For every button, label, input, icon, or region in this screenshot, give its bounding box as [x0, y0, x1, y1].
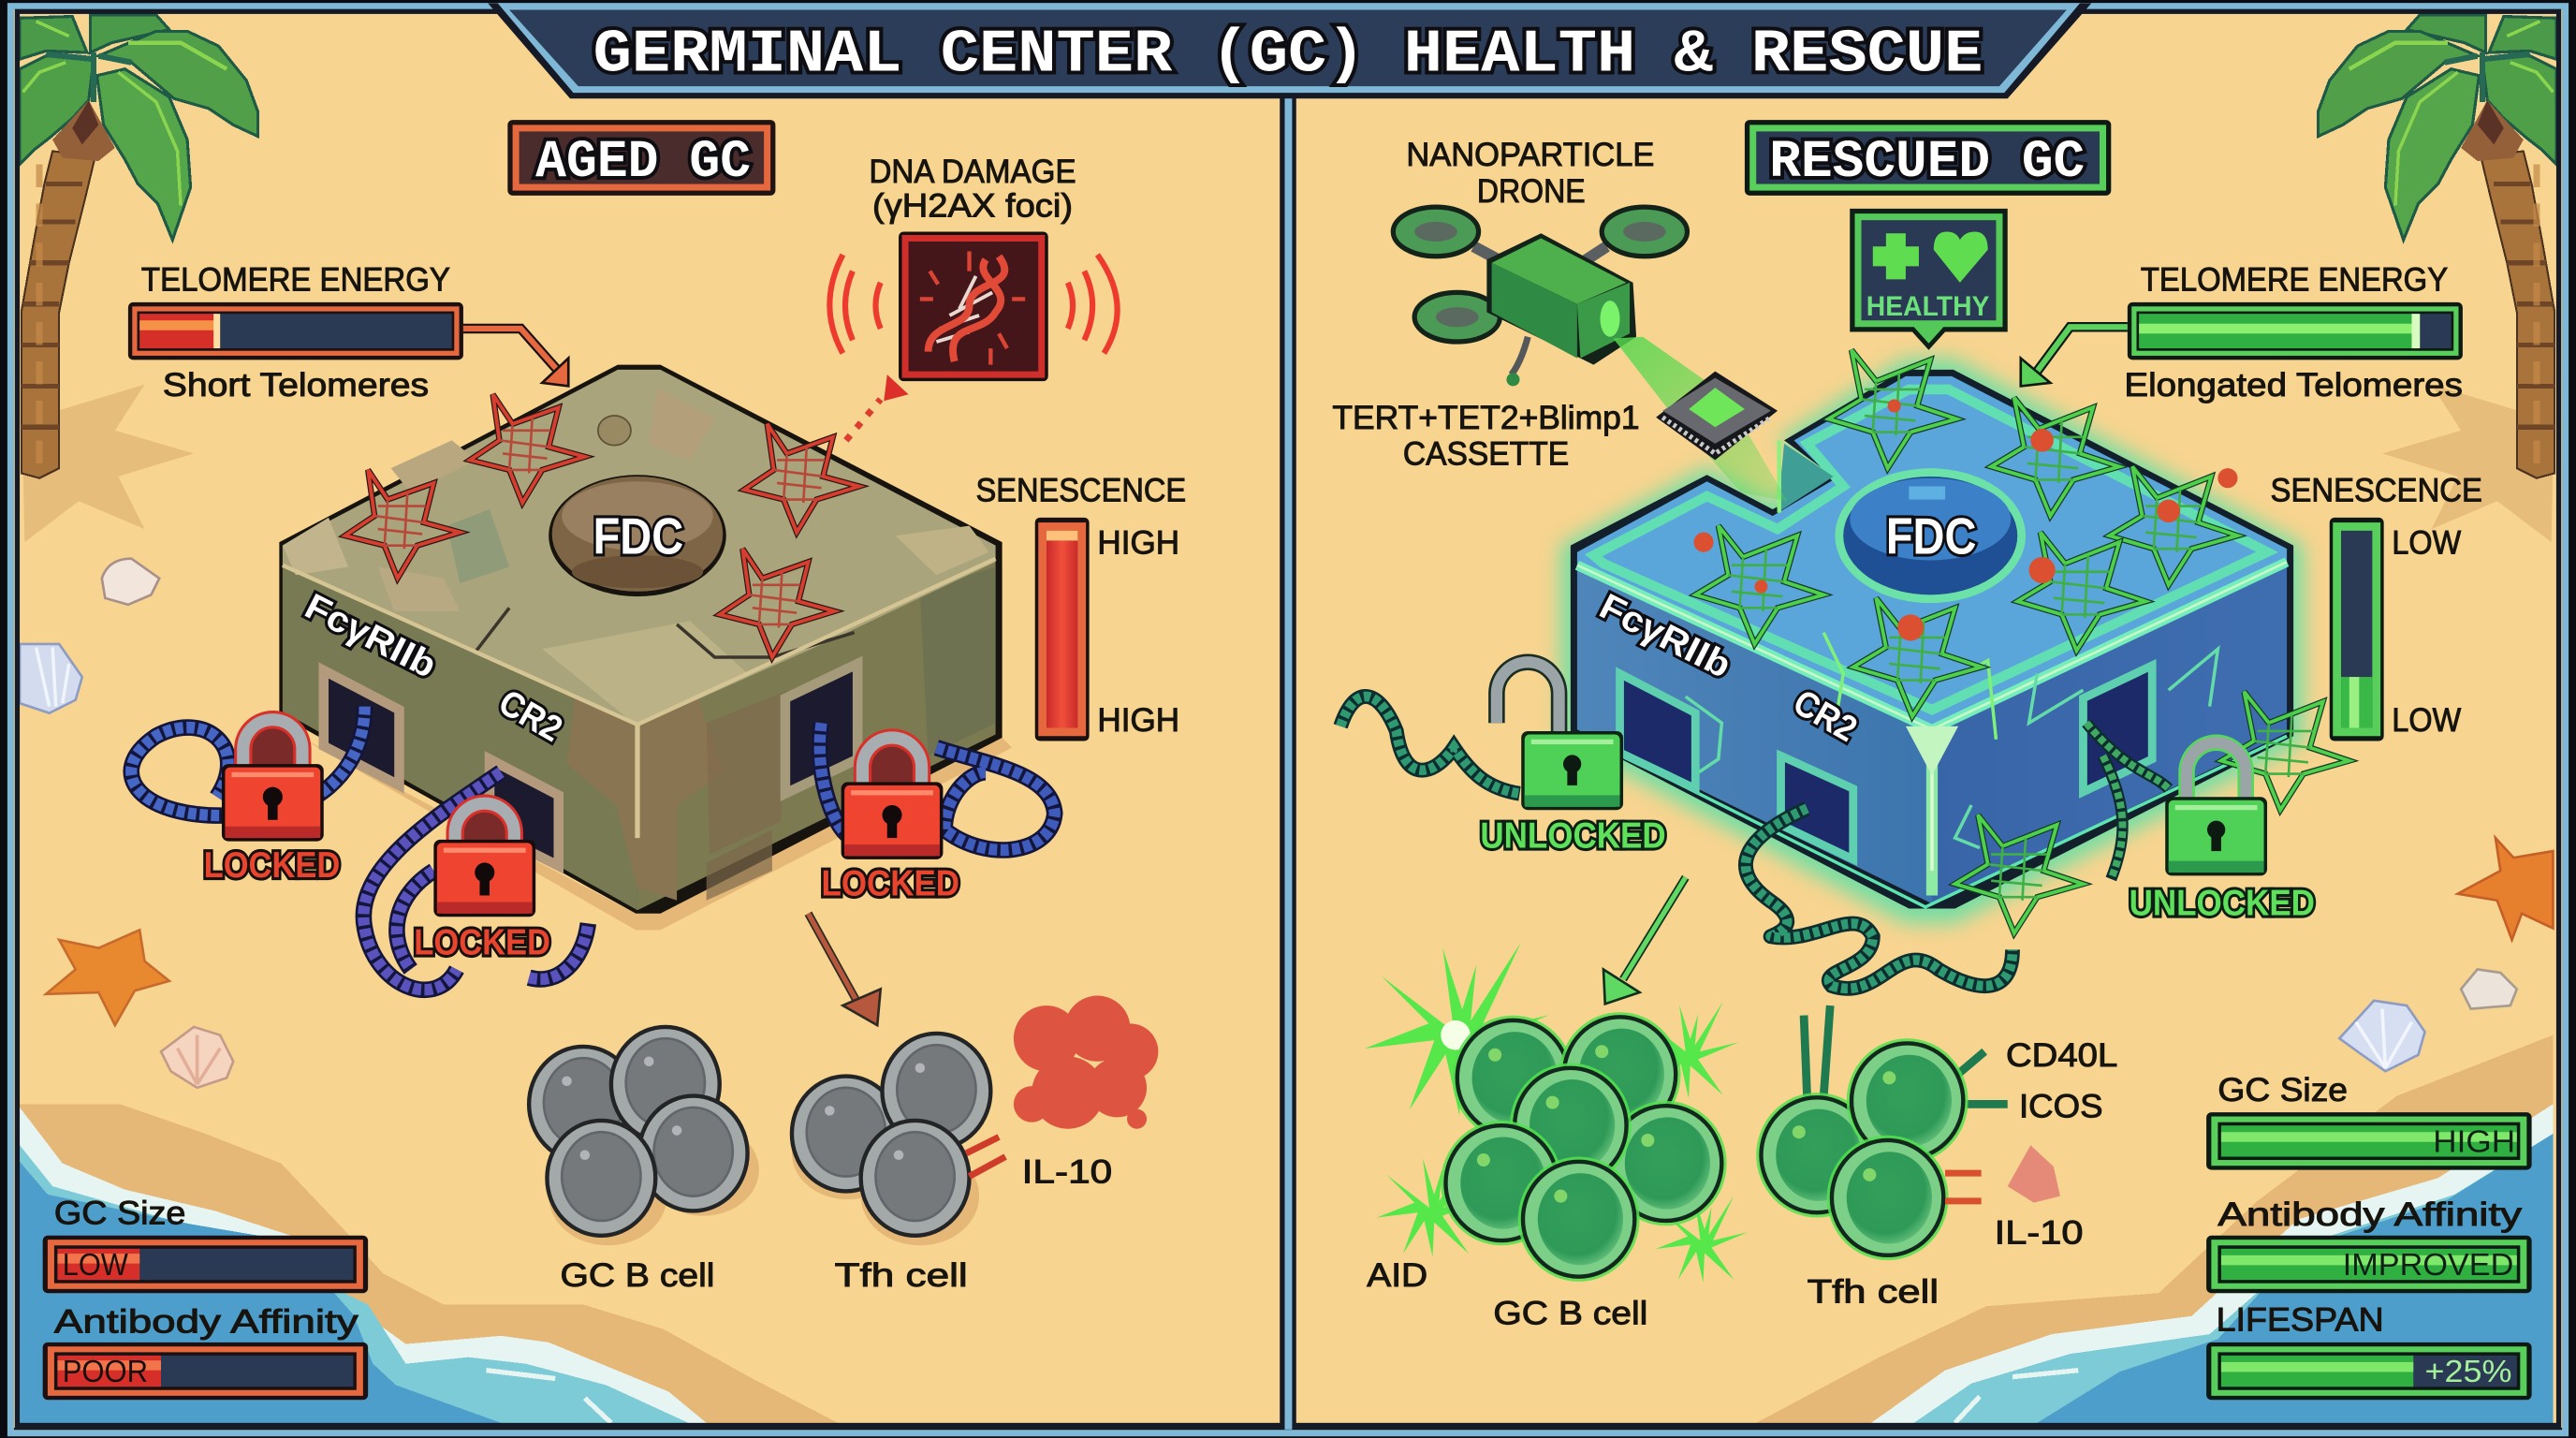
Tfh cell cluster rescued [1756, 1005, 2117, 1311]
chain: right [820, 723, 1055, 850]
unlock: left [1480, 662, 1666, 857]
web: rescued 4 [1694, 526, 1823, 644]
IL-10 cloud aged: IL-10 [1022, 1154, 1112, 1191]
senescence gauge: high: SENESCENCE [976, 472, 1186, 508]
web: rescued 1 [1828, 350, 1956, 468]
chain: centre [363, 772, 588, 990]
Tfh cell cluster rescued: Tfh cell [1808, 1274, 1939, 1311]
beach: left shoreline [20, 1104, 838, 1423]
shell: grey right [2461, 969, 2517, 1009]
Tfh cell cluster rescued: IL-10 [1995, 1215, 2083, 1252]
FDC dome rescued: FDC [1886, 507, 1976, 565]
IL-10 cloud aged [1014, 996, 1158, 1191]
stat: antibody affinity poor [43, 1303, 368, 1400]
senescence gauge: low: LOW [2392, 702, 2461, 739]
senescence gauge: high [976, 472, 1186, 741]
chain: broken centre [1746, 808, 2012, 989]
senescence gauge: low: LOW [2392, 524, 2461, 561]
stat: antibody affinity improved: Antibody Affinity [2217, 1196, 2523, 1233]
stat: antibody affinity improved: IMPROVED [2343, 1248, 2513, 1283]
healthy bubble: HEALTHY [1866, 291, 1990, 322]
shell: blue left [20, 644, 82, 713]
starfish right [2458, 838, 2553, 940]
starfish left [46, 930, 169, 1025]
Tfh cell cluster rescued: CD40L [2006, 1037, 2117, 1074]
senescence gauge: low [2271, 472, 2482, 741]
FDC dome aged: FDC [593, 507, 683, 565]
web: aged 1 [345, 470, 460, 579]
beach: right shoreline [1756, 1035, 2553, 1423]
lock: left: LOCKED [204, 845, 340, 886]
heading: rescued GC: RESCUED GC [1769, 132, 2085, 192]
GC B cell cluster rescued: AID [1367, 1257, 1427, 1294]
panel: aged GC [43, 120, 1186, 1400]
arrow: rescued block to cells [1603, 877, 1686, 1004]
stat: GC size low: GC Size [54, 1195, 185, 1231]
palm shadow right [2382, 381, 2554, 542]
label: CR2 rescued: CR2 [1787, 682, 1864, 750]
port: FcγRIIb rescued [1620, 674, 1695, 788]
port: FcγRIIb [324, 670, 399, 785]
web: side right [2221, 692, 2349, 810]
port: CR2 rescued [1781, 756, 1853, 859]
stat: antibody affinity poor: Antibody Affinity [54, 1303, 359, 1340]
heading: aged GC [507, 120, 775, 196]
stat: GC size low [43, 1195, 368, 1293]
label: FcγRIIb rescued: FcγRIIb [1593, 586, 1737, 686]
lock: left [204, 720, 340, 886]
stat: lifespan +25%: LIFESPAN [2217, 1302, 2384, 1339]
cassette chip: TERT+TET2+Blimp1 [1332, 400, 1640, 436]
shell: pink left [161, 1027, 233, 1088]
lock: right [822, 738, 959, 903]
telomere energy gauge: elongated [2124, 262, 2463, 404]
stat: antibody affinity poor: POOR [63, 1355, 148, 1389]
palm shadow left [22, 381, 194, 542]
web: side bottom [1955, 814, 2083, 933]
rescued block (FDC platform) [1560, 350, 2349, 933]
nanoparticle drone: NANOPARTICLE [1406, 137, 1654, 173]
GC B cell cluster rescued [1367, 1012, 1727, 1332]
palm tree left [20, 15, 258, 478]
DNA damage indicator: DNA DAMAGE [869, 154, 1076, 190]
arrow: telomere to rescued block [2021, 327, 2128, 386]
telomere energy gauge: elongated: Elongated Telomeres [2124, 367, 2463, 404]
FDC dome aged [549, 475, 726, 596]
unlock: right: UNLOCKED [2130, 884, 2315, 924]
cell shadows aged [549, 1108, 979, 1245]
shell: top left [102, 559, 159, 605]
Tfh cell cluster aged: Tfh cell [835, 1257, 968, 1294]
Tfh cell cluster rescued: ICOS [2019, 1088, 2103, 1124]
GC B cell cluster rescued: GC B cell [1493, 1296, 1647, 1332]
cassette chip: CASSETTE [1403, 436, 1569, 473]
stat: GC size high: GC Size [2217, 1072, 2348, 1108]
telomere energy gauge: elongated: TELOMERE ENERGY [2141, 262, 2448, 299]
Tfh cell cluster aged [792, 1034, 1005, 1294]
arrow: aged block to cells [809, 914, 881, 1025]
senescence gauge: low: SENESCENCE [2271, 472, 2482, 508]
lock: centre [414, 803, 550, 963]
web: rescued 3 [2110, 466, 2237, 585]
stat: lifespan +25% [2206, 1302, 2532, 1400]
port: right [785, 664, 857, 794]
arrow: telomere to block [463, 329, 568, 386]
lock: centre: LOCKED [414, 923, 550, 963]
nanoparticle drone [1393, 137, 1687, 386]
telomere energy gauge: short: Short Telomeres [163, 367, 429, 404]
label: FcγRIIb: FcγRIIb [299, 586, 443, 686]
web: aged 2 [470, 394, 585, 503]
telomere energy gauge: short: TELOMERE ENERGY [141, 262, 450, 299]
senescence gauge: high: HIGH [1097, 702, 1179, 739]
DNA damage indicator [829, 154, 1118, 440]
web: rescued 6 [1853, 598, 1982, 716]
GC B cell cluster aged: GC B cell [560, 1257, 714, 1294]
aged block (FDC platform) [279, 365, 1012, 930]
stat: GC size high [2206, 1072, 2532, 1170]
DNA damage indicator: (γH2AX foci) [872, 188, 1073, 225]
web: rescued 2 [1991, 398, 2119, 516]
unlock: left: UNLOCKED [1480, 816, 1666, 857]
stat: GC size high: HIGH [2433, 1124, 2515, 1159]
chain: left [131, 707, 365, 815]
stat: lifespan +25%: +25% [2425, 1355, 2512, 1389]
web: rescued 5 [2017, 533, 2145, 651]
unlock: right [2130, 742, 2315, 924]
chain: broken right [2086, 723, 2169, 879]
port: CR2 [490, 759, 559, 866]
label: CR2: CR2 [492, 682, 569, 750]
beam: drone to cassette [1614, 337, 1788, 501]
title text: GERMINAL CENTER (GC) HEALTH & RESCUE [593, 21, 1983, 89]
stat: antibody affinity improved [2206, 1196, 2532, 1293]
chain: broken left [1340, 697, 1519, 794]
healthy bubble [1850, 209, 2008, 350]
GC B cell cluster aged [529, 1027, 748, 1294]
stat: GC size low: LOW [63, 1248, 128, 1283]
panel: rescued GC [1332, 120, 2532, 1400]
lock: right: LOCKED [822, 863, 959, 903]
heading: rescued GC [1745, 120, 2111, 196]
web: aged 4 [720, 549, 835, 657]
cassette chip [1332, 372, 1778, 473]
FDC dome rescued [1835, 468, 2026, 603]
nanoparticle drone: DRONE [1477, 173, 1586, 210]
title banner [488, 4, 2091, 98]
senescence gauge: high: HIGH [1097, 524, 1179, 561]
telomere energy gauge: short [128, 262, 463, 404]
heading: aged GC: AGED GC [535, 132, 751, 192]
port: right rescued [2083, 666, 2152, 792]
shell: blue right [2339, 1001, 2425, 1071]
web: aged 3 [744, 424, 859, 533]
sparks: AID activity [1365, 943, 1748, 1283]
palm tree right [2318, 15, 2556, 478]
